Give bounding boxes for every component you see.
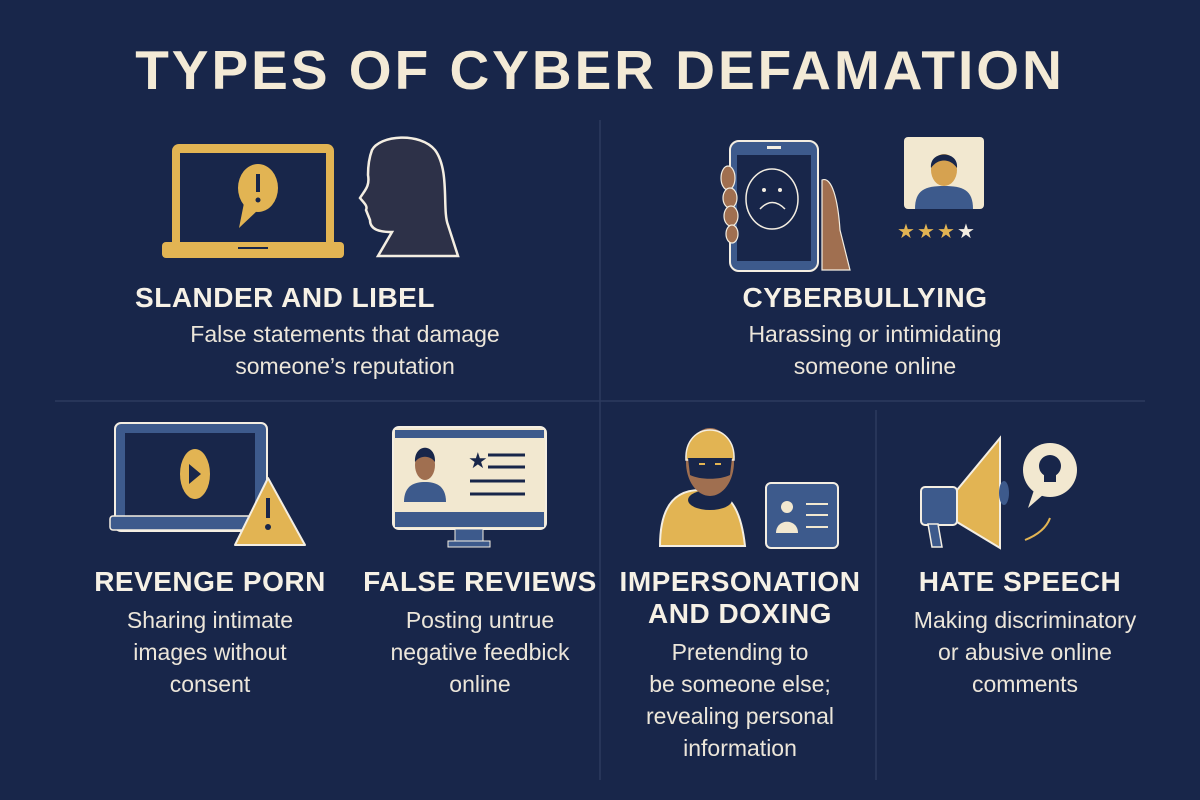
heading: false reviews: FALSE REVIEWS	[363, 566, 597, 597]
text: slander desc	[190, 321, 500, 379]
icon: monitor review	[393, 427, 546, 547]
icon: head silhouette	[360, 138, 458, 256]
text: false reviews desc: Posting untrue	[406, 607, 554, 633]
text: revenge porn desc: images without	[133, 639, 287, 665]
heading: impersonation and doxing: IMPERSONATION	[620, 566, 860, 597]
text: hate speech desc	[914, 607, 1136, 697]
icon: megaphone with skull bubble	[921, 438, 1077, 548]
text: revenge porn desc: Sharing intimate	[127, 607, 293, 633]
text: impersonation desc: revealing personal	[646, 703, 834, 729]
heading: impersonation and doxing	[620, 566, 860, 629]
icon: profile card with stars: ★	[957, 221, 975, 243]
text: hate speech desc: Making discriminatory	[914, 607, 1136, 633]
text: hate speech desc: or abusive online	[938, 639, 1112, 665]
heading: impersonation and doxing: AND DOXING	[648, 598, 832, 629]
icon: monitor review: ★	[468, 448, 488, 473]
heading: cyberbullying: CYBERBULLYING	[742, 282, 988, 313]
heading: slander and libel: SLANDER AND LIBEL	[135, 282, 435, 313]
text: impersonation desc: be someone else;	[649, 671, 831, 697]
text: cyberbullying desc	[748, 321, 1002, 379]
text: slander desc: someone’s reputation	[235, 353, 455, 379]
text: false reviews desc: negative feedbick	[390, 639, 570, 665]
heading: hate speech: HATE SPEECH	[919, 566, 1121, 597]
icon: masked person with id	[660, 428, 838, 548]
text: hate speech desc: comments	[972, 671, 1078, 697]
title: TYPES OF CYBER DEFAMATION	[135, 39, 1065, 101]
icon: profile card with stars: ★	[917, 221, 935, 243]
heading: revenge porn: REVENGE PORN	[94, 566, 326, 597]
text: impersonation desc	[646, 639, 834, 761]
icon: profile card with stars	[897, 137, 984, 243]
text: impersonation desc: Pretending to	[672, 639, 808, 665]
text: revenge porn desc	[127, 607, 293, 697]
text: slander desc: False statements that damage	[190, 321, 500, 347]
icon: profile card with stars: ★	[937, 221, 955, 243]
icon: laptop alert	[162, 144, 344, 258]
text: false reviews desc	[390, 607, 570, 697]
text: impersonation desc: information	[683, 735, 797, 761]
text: cyberbullying desc: Harassing or intimidating	[748, 321, 1002, 347]
text: revenge porn desc: consent	[170, 671, 250, 697]
icon: video laptop warning	[110, 423, 305, 545]
text: false reviews desc: online	[449, 671, 511, 697]
icon: profile card with stars: ★	[897, 221, 915, 243]
icon: phone with hand	[721, 141, 850, 271]
text: cyberbullying desc: someone online	[794, 353, 956, 379]
